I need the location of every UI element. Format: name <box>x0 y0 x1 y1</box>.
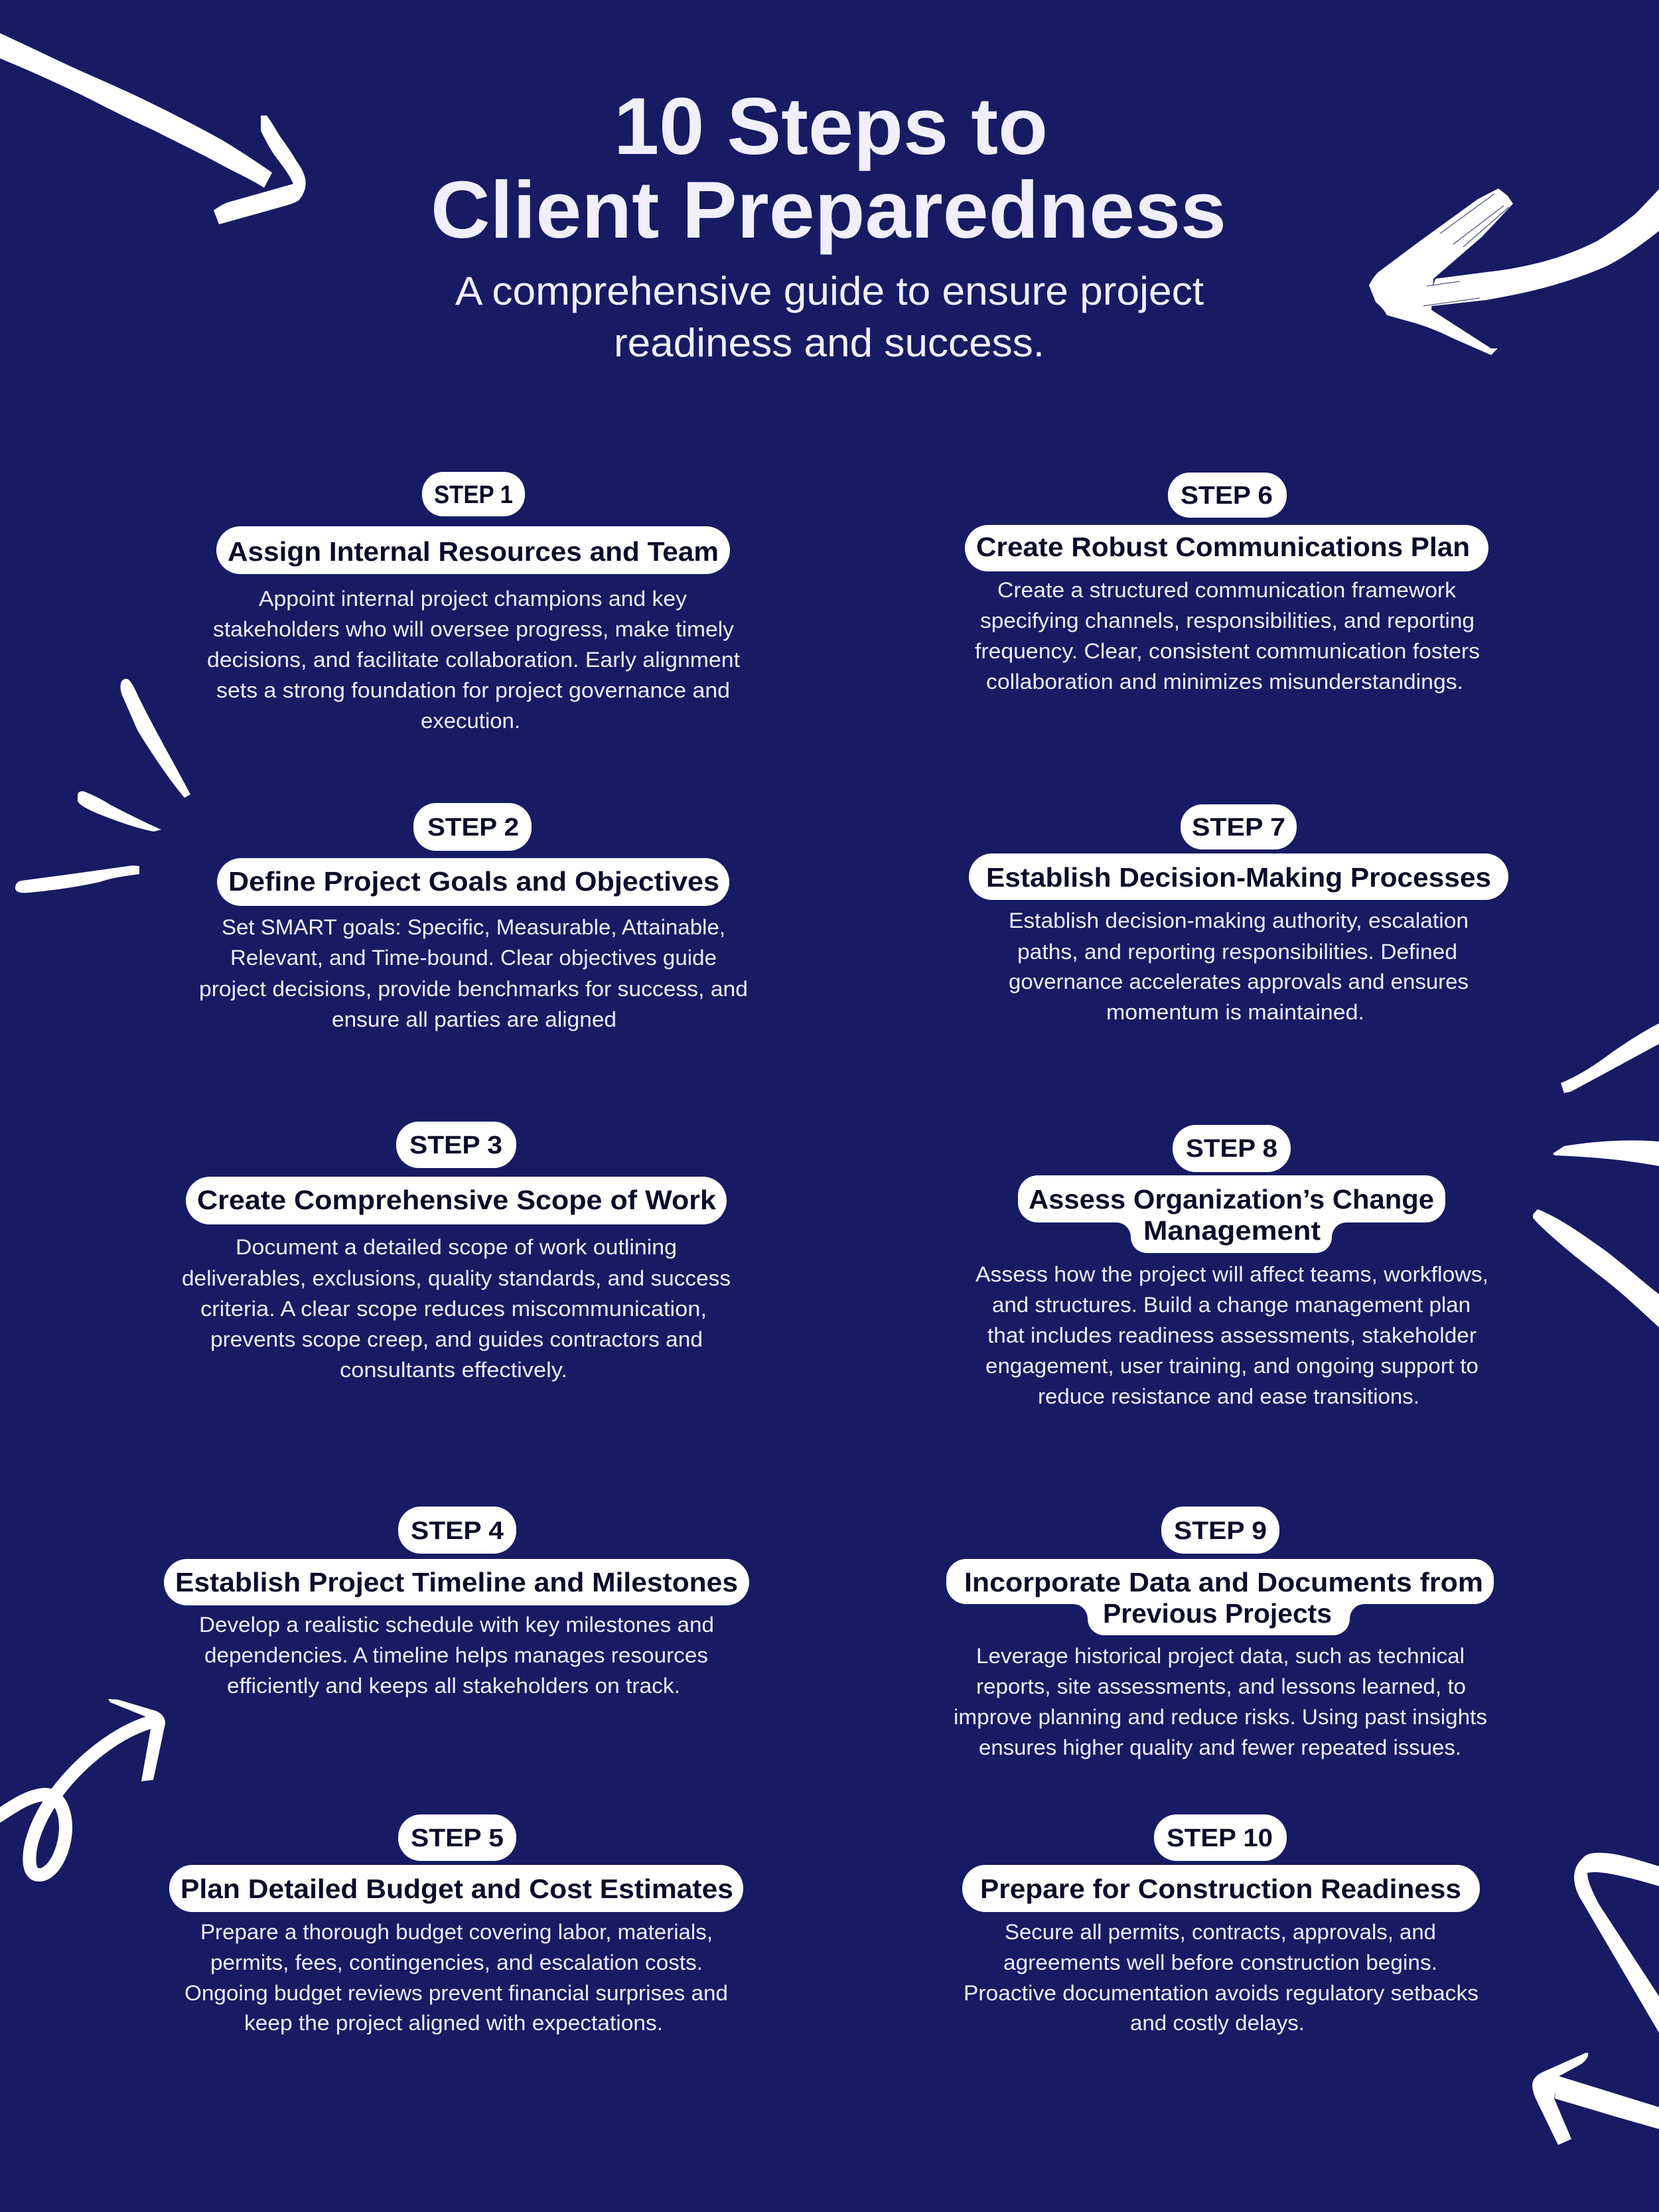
step 6 description: specifying channels, responsibilities, and reporting <box>980 609 1475 632</box>
step 2 badge: STEP 2 <box>427 814 519 842</box>
step 5 description: Prepare a thorough budget covering labor, materials, <box>200 1920 713 1944</box>
step 2 description: ensure all parties are aligned <box>332 1007 616 1031</box>
step 2 description: project decisions, provide benchmarks for success, and <box>199 977 748 1001</box>
step 10 description: Secure all permits, contracts, approvals, and <box>1005 1920 1436 1944</box>
step 6 heading <box>965 525 1488 571</box>
step 3 description: criteria. A clear scope reduces miscommunication, <box>200 1297 707 1321</box>
arrow: top left brush arrow <box>0 33 306 224</box>
step 6 badge: STEP 6 <box>1181 482 1273 510</box>
step 7 badge: STEP 7 <box>1192 814 1285 842</box>
arrow: top right brush arrow <box>1369 188 1659 355</box>
step 4 heading: Establish Project Timeline and Milestones <box>175 1567 738 1597</box>
step 7 description: governance accelerates approvals and ensures <box>1009 970 1469 994</box>
panel: step 10 <box>962 1814 1480 2035</box>
step 1 heading <box>216 526 730 574</box>
title: 10 Steps to <box>614 81 1048 171</box>
step 10 badge: STEP 10 <box>1167 1824 1273 1852</box>
panel: step 9 <box>946 1507 1494 1759</box>
step 8 badge: STEP 8 <box>1186 1135 1277 1163</box>
step 7 description: paths, and reporting responsibilities. Defined <box>1017 940 1457 964</box>
step 7 heading <box>969 853 1508 900</box>
step 9 heading: Incorporate Data and Documents from <box>964 1567 1483 1597</box>
step 3 heading <box>186 1177 727 1224</box>
step 3 badge <box>396 1122 516 1168</box>
step 7 heading: Establish Decision-Making Processes <box>986 862 1491 893</box>
step 1 badge: STEP 1 <box>434 481 513 509</box>
step 5 badge <box>398 1814 516 1861</box>
step 8 description <box>975 1262 1488 1408</box>
step 1 description: Appoint internal project champions and key <box>259 587 687 611</box>
step 5 description <box>184 1920 728 2035</box>
step 4 description: efficiently and keeps all stakeholders on track. <box>227 1674 680 1698</box>
panel: step 8 <box>975 1125 1488 1408</box>
step 9 badge: STEP 9 <box>1174 1517 1267 1545</box>
step 8 description: engagement, user training, and ongoing support to <box>985 1354 1479 1378</box>
step 10 description <box>964 1920 1479 2035</box>
step 8 badge <box>1173 1125 1291 1172</box>
subtitle: A comprehensive guide to ensure project <box>455 269 1204 313</box>
step 8 heading <box>1018 1175 1445 1253</box>
step 2 description: Set SMART goals: Specific, Measurable, Attainable, <box>222 915 725 939</box>
step 3 description <box>182 1235 731 1382</box>
panel: step 4 <box>164 1507 749 1698</box>
step 9 badge <box>1161 1507 1279 1554</box>
step 3 heading: Create Comprehensive Scope of Work <box>197 1185 716 1215</box>
step 2 heading <box>217 858 729 906</box>
step 6 description: Create a structured communication framework <box>997 578 1457 602</box>
step 2 description <box>199 915 748 1031</box>
step 9 description: reports, site assessments, and lessons learned, to <box>976 1674 1466 1698</box>
step 9 heading <box>946 1559 1494 1635</box>
step 10 heading <box>962 1865 1480 1912</box>
step 7 description <box>1009 909 1469 1024</box>
panel: step 2 <box>199 803 748 1031</box>
step 6 badge <box>1168 473 1287 518</box>
step 3 description: prevents scope creep, and guides contractors and <box>210 1327 703 1351</box>
step 2 heading: Define Project Goals and Objectives <box>228 866 719 897</box>
step 4 heading <box>164 1559 749 1605</box>
step 9 description <box>954 1644 1487 1759</box>
step 10 badge <box>1154 1814 1287 1861</box>
step 3 badge: STEP 3 <box>409 1132 502 1159</box>
arrow: bottom right loop arrow <box>1532 1853 1659 2145</box>
panel: step 3 <box>182 1122 731 1382</box>
step 5 heading <box>169 1865 743 1912</box>
panel: step 6 <box>965 473 1488 694</box>
step 3 description: deliverables, exclusions, quality standards, and success <box>182 1266 731 1290</box>
step 6 description <box>975 578 1480 694</box>
step 5 badge: STEP 5 <box>411 1824 504 1852</box>
step 4 description: dependencies. A timeline helps manages resources <box>204 1643 708 1667</box>
step 10 description: Proactive documentation avoids regulatory setbacks <box>964 1981 1479 2005</box>
step 5 description: keep the project aligned with expectations. <box>244 2011 663 2035</box>
step 9 description: Leverage historical project data, such as technical <box>976 1644 1465 1668</box>
step 1 badge <box>422 472 525 516</box>
step 1 description: execution. <box>421 709 520 733</box>
step 1 description <box>207 587 740 733</box>
step 2 description: Relevant, and Time-bound. Clear objectives guide <box>230 946 717 970</box>
step 8 heading: Assess Organization’s Change <box>1029 1184 1434 1215</box>
step 9 heading: Previous Projects <box>1103 1598 1332 1629</box>
subtitle <box>455 269 1204 365</box>
step 7 badge <box>1181 804 1297 849</box>
step 4 badge: STEP 4 <box>411 1517 504 1545</box>
icon: right burst strokes <box>1533 1023 1659 1327</box>
step 10 heading: Prepare for Construction Readiness <box>980 1874 1461 1904</box>
step 1 description: sets a strong foundation for project governance and <box>216 678 730 702</box>
panel: step 1 <box>207 472 740 733</box>
step 6 description: collaboration and minimizes misunderstandings. <box>986 670 1463 694</box>
step 6 description: frequency. Clear, consistent communication fosters <box>975 639 1480 663</box>
step 5 description: permits, fees, contingencies, and escalation costs. <box>210 1951 703 1974</box>
step 6 heading: Create Robust Communications Plan <box>976 532 1470 562</box>
title: Client Preparedness <box>431 165 1226 255</box>
step 10 description: and costly delays. <box>1130 2011 1305 2035</box>
step 4 description <box>199 1613 714 1698</box>
step 1 description: decisions, and facilitate collaboration. Early alignment <box>207 648 740 672</box>
step 3 description: consultants effectively. <box>340 1358 567 1382</box>
step 5 heading: Plan Detailed Budget and Cost Estimates <box>180 1874 733 1904</box>
step 10 description: agreements well before construction begins. <box>1003 1951 1437 1974</box>
step 8 heading: Management <box>1143 1215 1321 1246</box>
step 8 description: Assess how the project will affect teams, workflows, <box>975 1262 1488 1286</box>
step 9 description: improve planning and reduce risks. Using past insights <box>954 1705 1487 1729</box>
step 3 description: Document a detailed scope of work outlining <box>236 1235 677 1259</box>
step 1 heading: Assign Internal Resources and Team <box>228 536 719 567</box>
icon: left burst strokes <box>15 679 190 893</box>
step 8 description: and structures. Build a change management plan <box>992 1293 1471 1317</box>
step 8 description: that includes readiness assessments, stakeholder <box>987 1323 1477 1347</box>
step 8 description: reduce resistance and ease transitions. <box>1038 1384 1419 1408</box>
step 7 description: momentum is maintained. <box>1106 1000 1364 1024</box>
panel: step 7 <box>969 804 1508 1024</box>
step 5 description: Ongoing budget reviews prevent financial surprises and <box>184 1981 728 2005</box>
panel: step 5 <box>169 1814 743 2035</box>
title <box>431 81 1226 255</box>
step 7 description: Establish decision-making authority, escalation <box>1009 909 1469 932</box>
step 1 description: stakeholders who will oversee progress, make timely <box>213 617 734 641</box>
step 4 description: Develop a realistic schedule with key milestones and <box>199 1613 714 1637</box>
step 4 badge <box>398 1507 516 1554</box>
arrow: bottom left looping arrow <box>0 1699 165 1875</box>
step 2 badge <box>413 803 532 851</box>
subtitle: readiness and success. <box>614 321 1045 365</box>
step 9 description: ensures higher quality and fewer repeated issues. <box>979 1735 1461 1759</box>
